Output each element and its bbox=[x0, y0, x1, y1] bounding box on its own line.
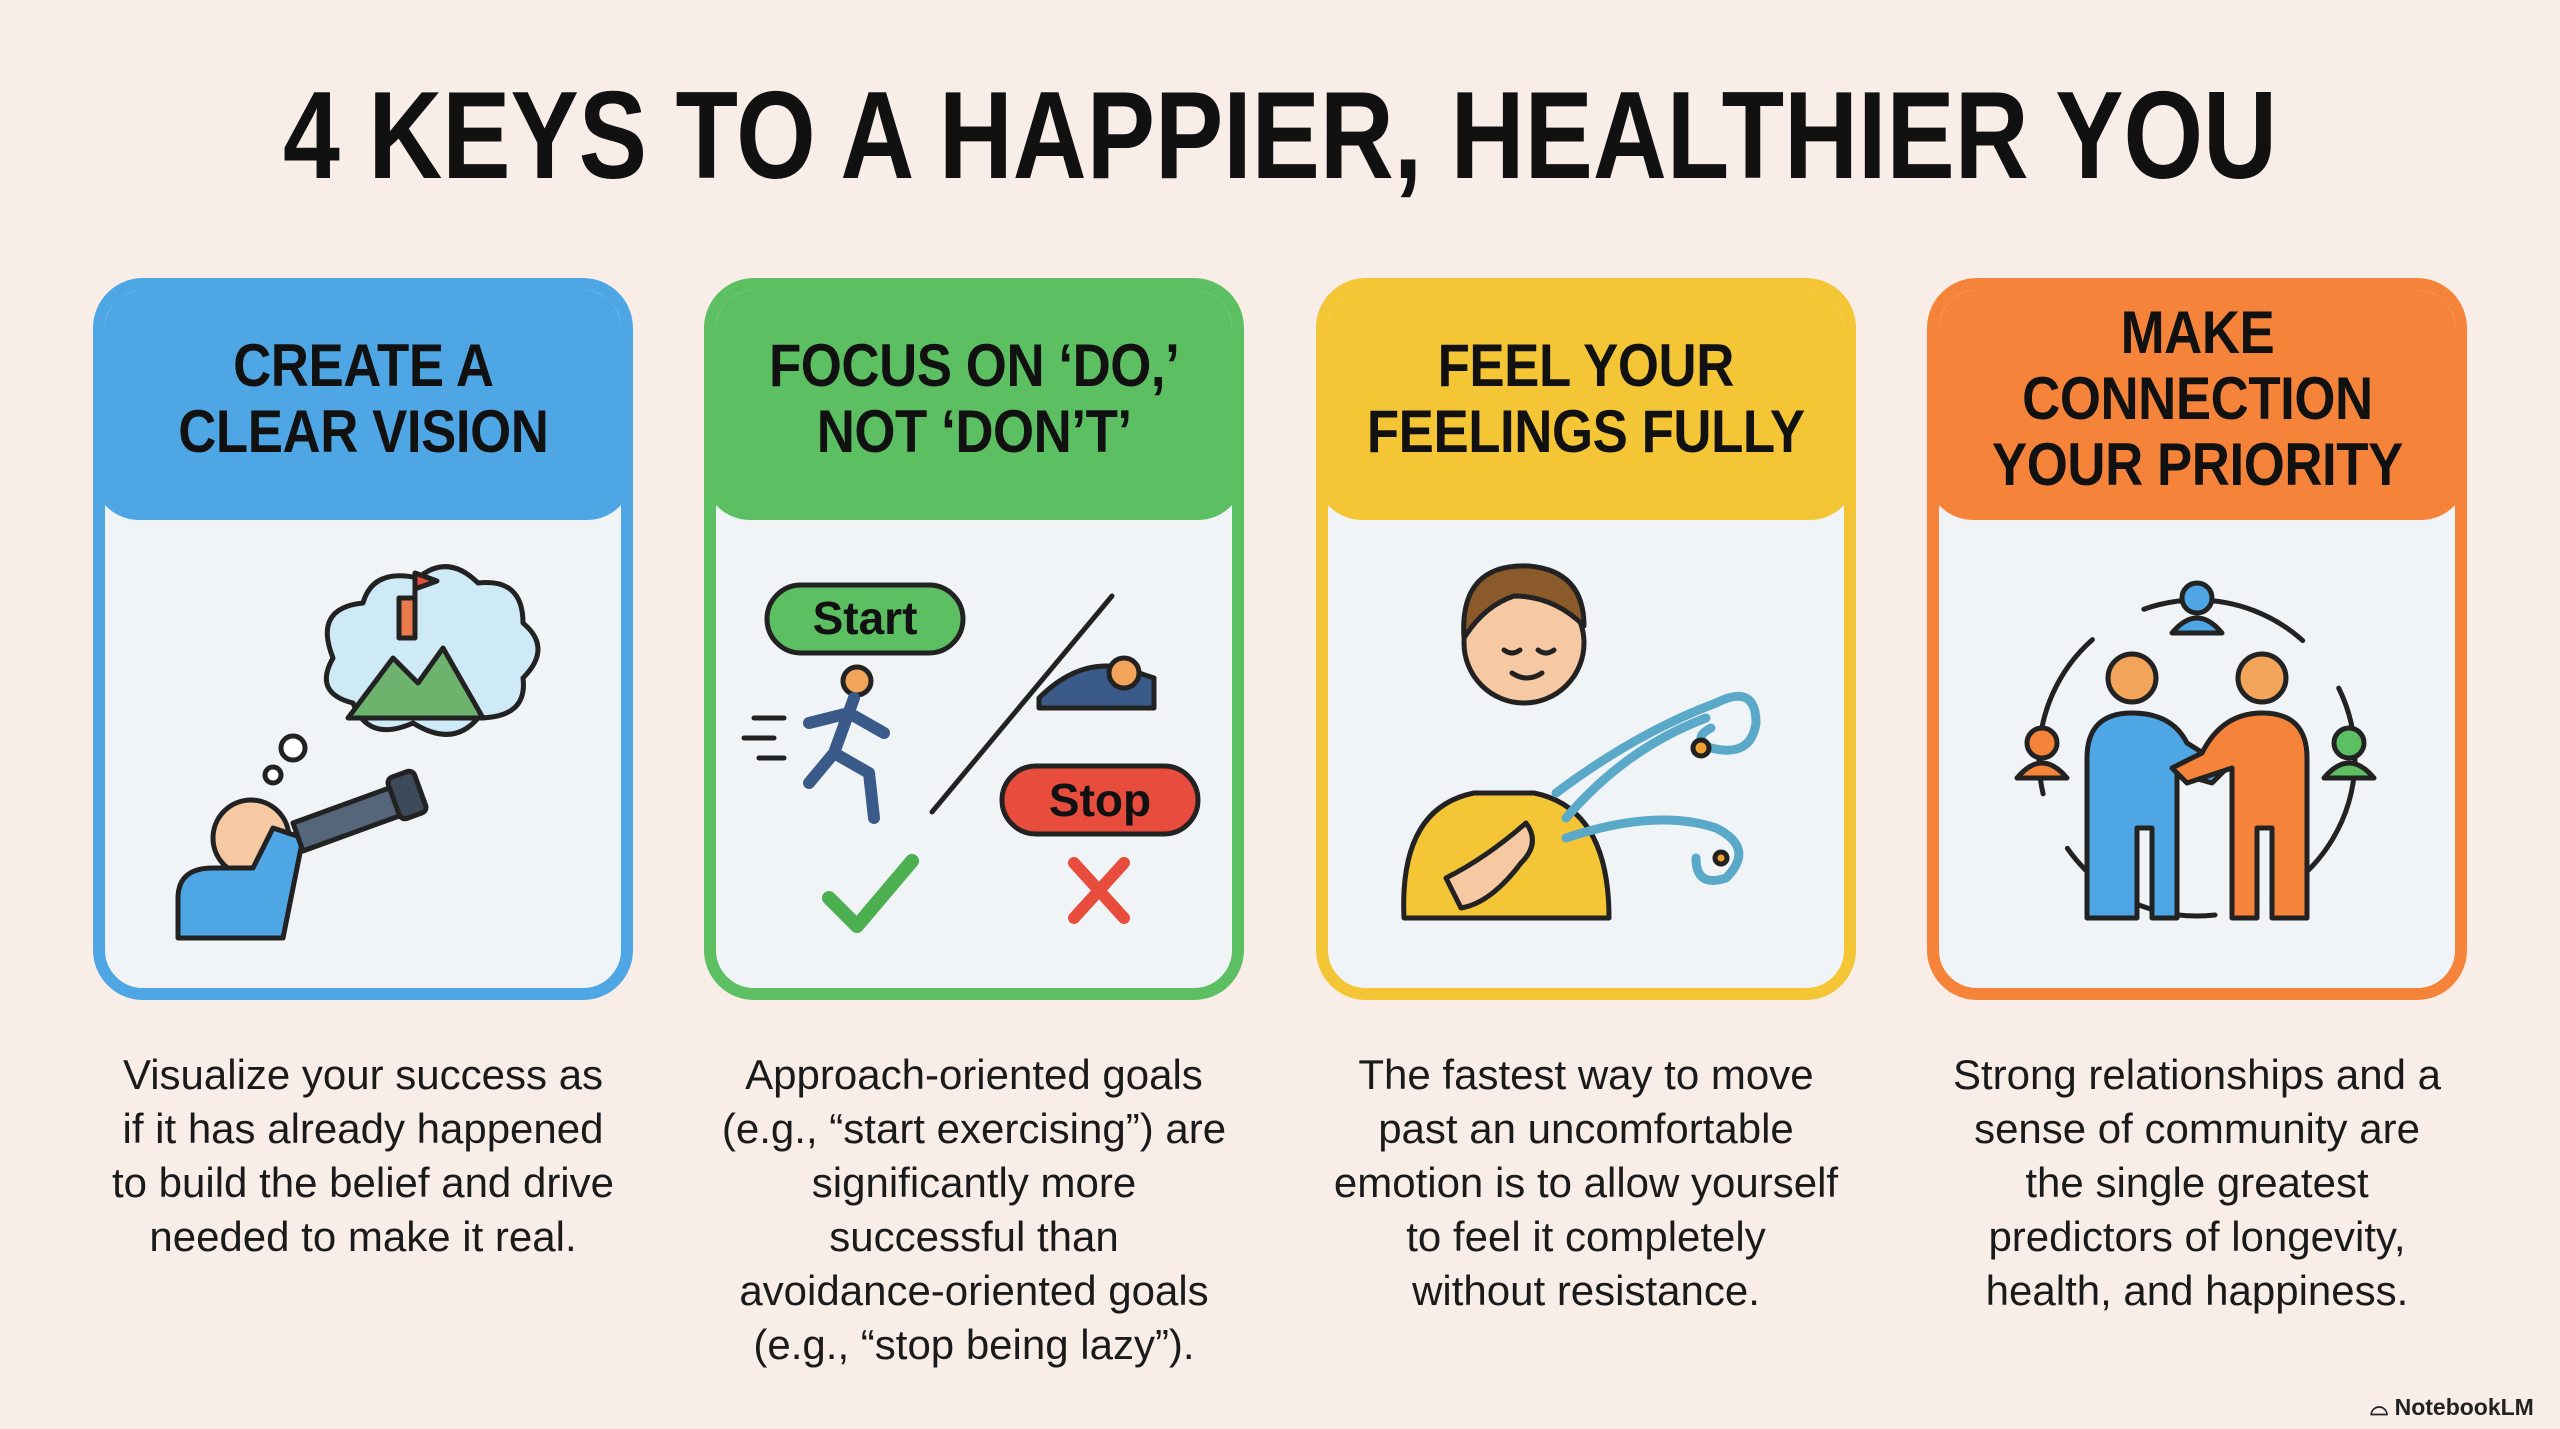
heading: focus on do bbox=[704, 278, 1244, 520]
heading: feel your feelings: FEEL YOUR bbox=[1438, 332, 1734, 399]
text block: vision: Visualize your success as bbox=[123, 1051, 603, 1098]
text block: feelings: to feel it completely bbox=[1406, 1213, 1766, 1260]
text block: connection: predictors of longevity, bbox=[1988, 1213, 2406, 1260]
heading: focus on do: FOCUS ON ‘DO,’ bbox=[769, 332, 1179, 399]
panel: focus on do bbox=[704, 278, 1244, 1000]
text block: do: avoidance-oriented goals bbox=[739, 1267, 1209, 1314]
text block: vision: needed to make it real. bbox=[149, 1213, 577, 1260]
text block: connection bbox=[1953, 1051, 2441, 1314]
heading: feel your feelings bbox=[1316, 278, 1856, 520]
heading: create a clear vision bbox=[93, 278, 633, 520]
panel: connection bbox=[1927, 278, 2467, 1000]
text block: connection: Strong relationships and a bbox=[1953, 1051, 2441, 1098]
icon: person breathing with wind bbox=[1401, 563, 1760, 920]
icon: start vs stop bbox=[742, 582, 1200, 933]
text block: do: successful than bbox=[829, 1213, 1119, 1260]
text block: feelings: past an uncomfortable bbox=[1378, 1105, 1794, 1152]
icon: start vs stop: Start bbox=[813, 592, 917, 644]
text block: do: (e.g., “stop being lazy”). bbox=[753, 1321, 1195, 1368]
text block: connection: sense of community are bbox=[1974, 1105, 2420, 1152]
text block: vision: to build the belief and drive bbox=[112, 1159, 614, 1206]
panel: feel your feelings bbox=[1316, 278, 1856, 1000]
heading: feel your feelings: FEELINGS FULLY bbox=[1367, 398, 1805, 465]
heading: create a clear vision: CLEAR VISION bbox=[178, 398, 548, 465]
text block: feelings: without resistance. bbox=[1412, 1267, 1760, 1314]
text block: feelings: emotion is to allow yourself bbox=[1334, 1159, 1838, 1206]
text block: connection: health, and happiness. bbox=[1986, 1267, 2408, 1314]
icon: connected people bbox=[2014, 580, 2376, 920]
text block: do: significantly more bbox=[812, 1159, 1136, 1206]
heading: connection: MAKE bbox=[2120, 299, 2274, 366]
panel: create a clear vision bbox=[93, 278, 633, 1000]
heading: create a clear vision: CREATE A bbox=[233, 332, 493, 399]
icon: person with telescope dreaming bbox=[176, 564, 540, 940]
heading: connection: CONNECTION bbox=[2022, 365, 2372, 432]
text block: feelings bbox=[1334, 1051, 1838, 1314]
text block: do bbox=[722, 1051, 1226, 1368]
heading: connection: YOUR PRIORITY bbox=[1992, 431, 2402, 498]
text block: do: (e.g., “start exercising”) are bbox=[722, 1105, 1226, 1152]
text block: do: Approach-oriented goals bbox=[745, 1051, 1203, 1098]
heading: focus on do: NOT ‘DON’T’ bbox=[817, 398, 1131, 465]
icon: start vs stop: Stop bbox=[1049, 774, 1151, 826]
heading: connection bbox=[1927, 278, 2467, 520]
text block: vision bbox=[112, 1051, 614, 1260]
text block: connection: the single greatest bbox=[2025, 1159, 2369, 1206]
text block: vision: if it has already happened bbox=[122, 1105, 604, 1152]
logo: NotebookLM: ⌓ NotebookLM bbox=[2370, 1394, 2534, 1420]
text block: feelings: The fastest way to move bbox=[1358, 1051, 1814, 1098]
